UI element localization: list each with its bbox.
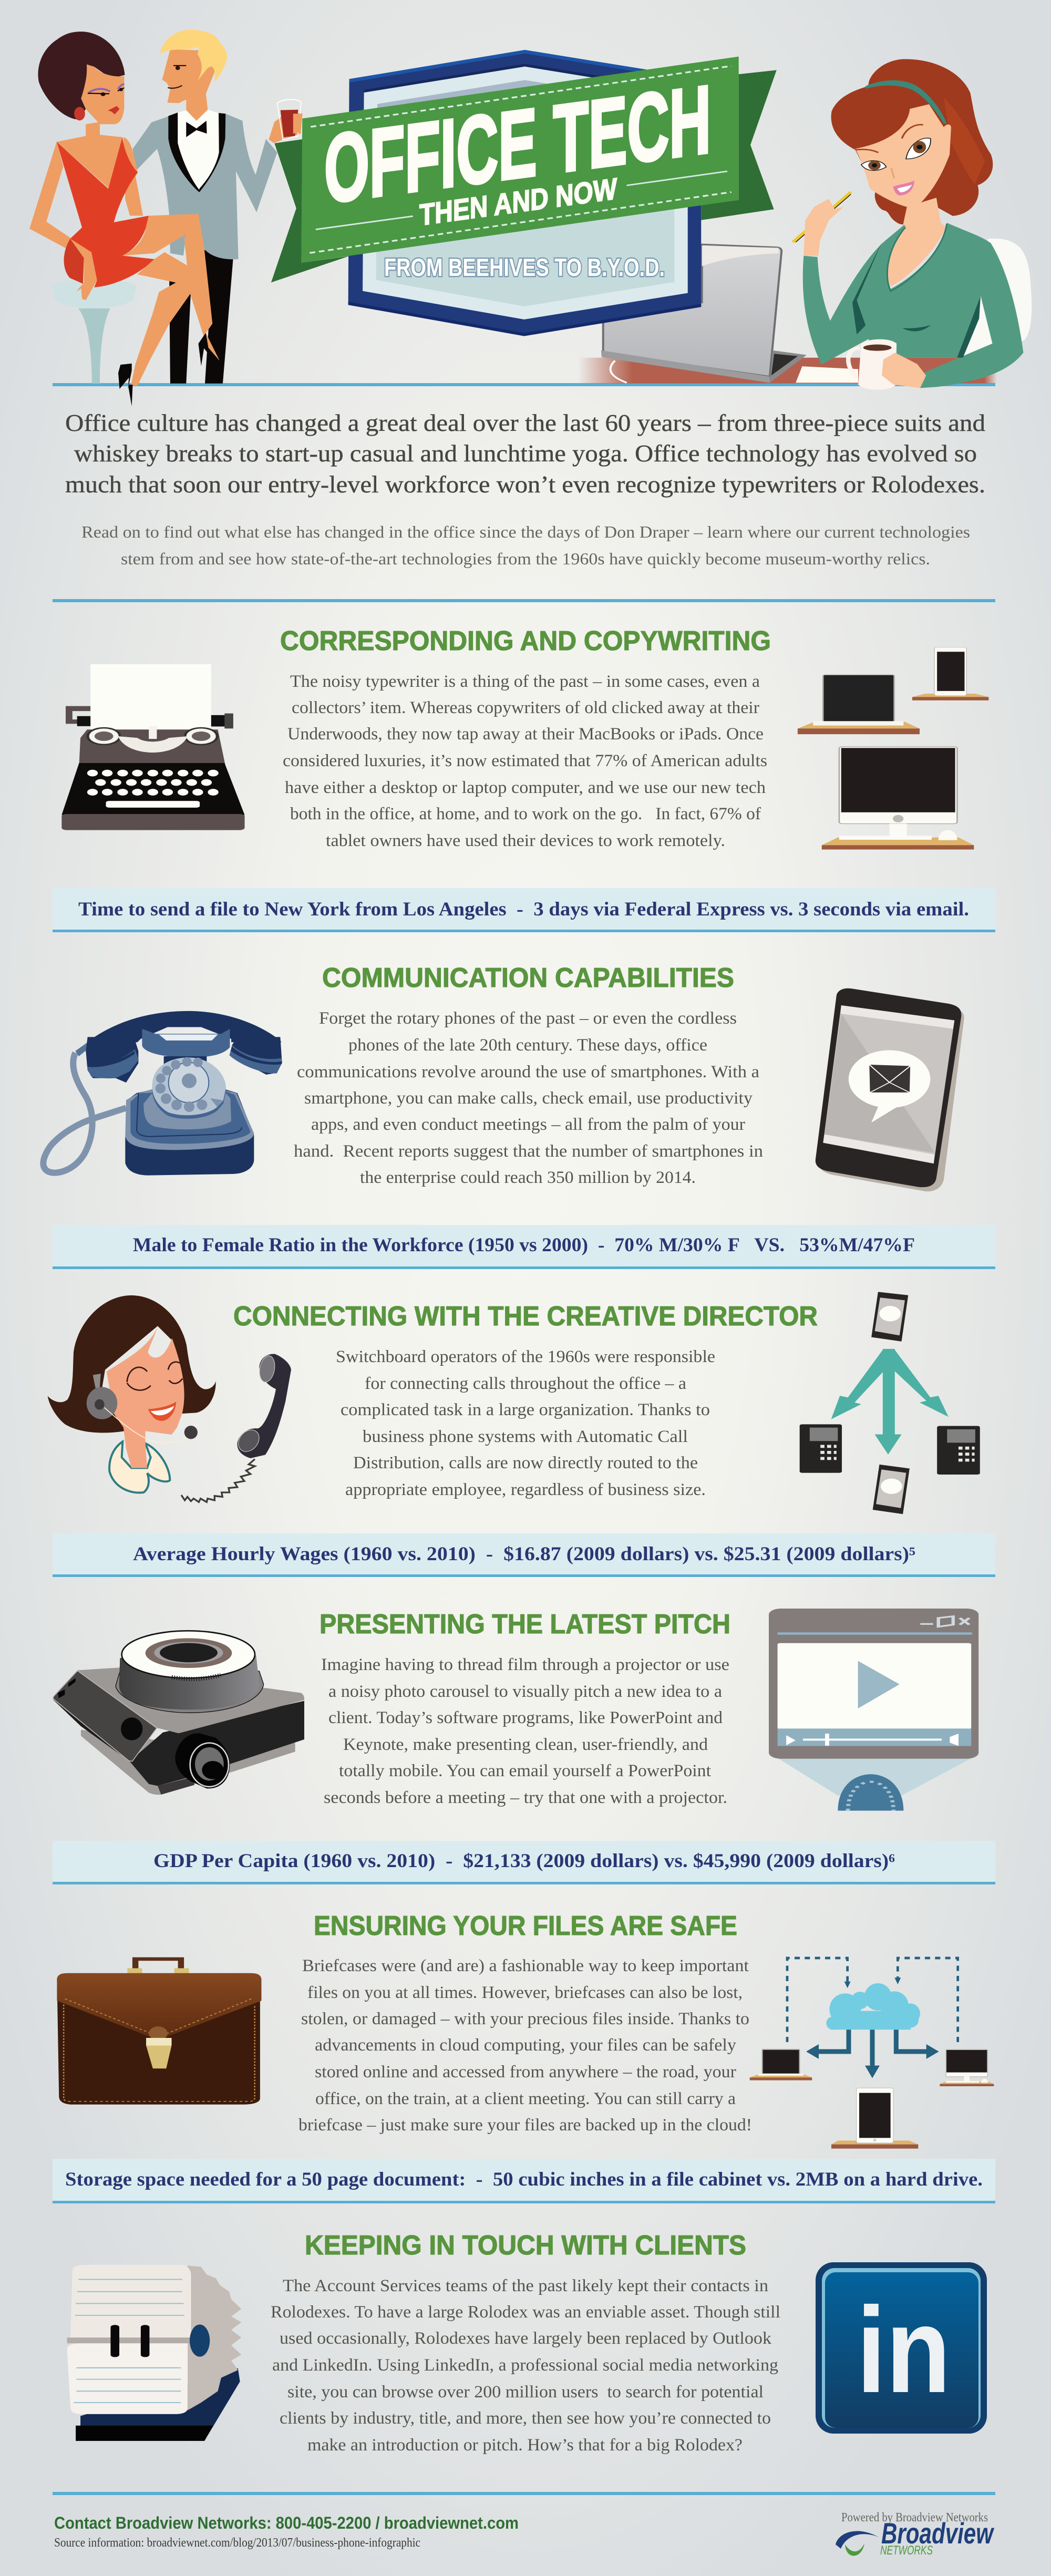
icon: typewriter: [61, 664, 245, 830]
body text: presenting: totally mobile. You can email yourself a PowerPoint: [339, 1761, 711, 1780]
body text: connecting: Distribution, calls are now directly routed to the: [353, 1454, 698, 1472]
stat bar 3: Average Hourly Wages (1960 vs. 2010) - $16.87 (2009 dollars) vs. $25.31 (2009 dollars)⁵: [133, 1543, 915, 1565]
body text: files safe: stored online and accessed from anywhere – the road, your: [315, 2063, 736, 2082]
ribbon: green banner: [271, 57, 777, 282]
icon: briefcase: [57, 1959, 261, 2105]
body text: files safe: briefcase – just make sure your files are backed up in the cloud!: [298, 2116, 752, 2135]
badge: navy hexagon: [348, 50, 701, 336]
rule: section start: [53, 599, 995, 602]
body text: keeping in touch: make an introduction or pitch. How’s that for a big Rolodex?: [307, 2436, 743, 2455]
logo: broadview: Broadview: [881, 2517, 995, 2550]
body text: files safe: office, on the train, at a client meeting. You can still carry a: [315, 2089, 736, 2108]
title: FROM BEEHIVES TO B.Y.O.D.: [384, 253, 665, 281]
icon: switchboard operator: [48, 1295, 291, 1502]
body text: files safe: advancements in cloud computing, your files can be safely: [315, 2036, 737, 2055]
heading: corresponding: CORRESPONDING AND COPYWRITING: [280, 626, 771, 656]
body text: presenting: a noisy photo carousel to visually pitch a new idea to a: [328, 1682, 722, 1701]
intro secondary text: [81, 522, 970, 568]
rule: footer: [53, 2492, 995, 2495]
heading: communication: COMMUNICATION CAPABILITIES: [322, 963, 734, 993]
body text: presenting: client. Today’s software programs, like PowerPoint and: [328, 1708, 723, 1727]
illustration: woman at laptop: [578, 59, 1032, 390]
heading: connecting: CONNECTING WITH THE CREATIVE DIRECTOR: [233, 1301, 818, 1332]
body text: connecting: business phone systems with Automatic Call: [363, 1427, 688, 1446]
body text: keeping in touch: The Account Services teams of the past likely kept their contacts in: [283, 2276, 768, 2295]
body text: files safe: files on you at all times. However, briefcases can also be lost,: [307, 1983, 743, 2002]
intro paragraph: Office culture has changed a great deal over the last 60 years – from three-piece suits and: [65, 409, 985, 436]
body text: corresponding: collectors’ item. Whereas copywriters of old clicked away at their: [292, 698, 759, 717]
body text: communication: Forget the rotary phones of the past – or even the cordless: [319, 1009, 737, 1028]
stat bar 1: [53, 888, 995, 932]
body text: presenting: Keynote, make presenting clean, user-friendly, and: [343, 1735, 708, 1754]
heading: files safe: ENSURING YOUR FILES ARE SAFE: [314, 1911, 737, 1941]
body text: corresponding: The noisy typewriter is a thing of the past – in some cases, even a: [290, 672, 760, 691]
icon: video player: [769, 1609, 978, 1811]
body text: communication: phones of the late 20th century. These days, office: [348, 1036, 707, 1055]
heading: presenting: PRESENTING THE LATEST PITCH: [320, 1609, 730, 1640]
body text: communication: hand. Recent reports suggest that the number of smartphones in: [294, 1142, 763, 1161]
body text: keeping in touch: Rolodexes. To have a large Rolodex was an enviable asset. Though still: [271, 2303, 780, 2322]
body text: files safe: [298, 1956, 752, 2135]
heading: keeping in touch: KEEPING IN TOUCH WITH CLIENTS: [305, 2230, 746, 2261]
powered by: Powered by Broadview Networks: [841, 2511, 988, 2525]
stat bar 5: [53, 2159, 995, 2203]
body text: communication: the enterprise could reach 350 million by 2014.: [360, 1168, 696, 1187]
icon: rolodex: [67, 2265, 241, 2441]
body text: connecting: for connecting calls throughout the office – a: [365, 1374, 686, 1393]
stat bar 2: Male to Female Ratio in the Workforce (1950 vs 2000) - 70% M/30% F VS. 53%M/47%F: [133, 1234, 915, 1256]
body text: keeping in touch: site, you can browse over 200 million users to search for potential: [287, 2383, 764, 2402]
icon: smartphone with email: [816, 988, 964, 1191]
body text: connecting: Switchboard operators of the 1960s were responsible: [336, 1347, 715, 1366]
logo: broadview: [836, 2517, 995, 2558]
title: OFFICE TECH: [324, 65, 711, 223]
stat bar 2: [53, 1225, 995, 1269]
body text: communication: [294, 1009, 763, 1187]
body text: corresponding: [283, 672, 767, 850]
body text: communication: communications revolve around the use of smartphones. With a: [297, 1063, 759, 1081]
icon: modern devices: [798, 647, 988, 850]
body text: keeping in touch: clients by industry, title, and more, then see how you’re connected to: [280, 2409, 771, 2428]
body text: communication: apps, and even conduct meetings – all from the palm of your: [311, 1115, 745, 1134]
icon: cloud sync diagram: [750, 1958, 994, 2149]
intro secondary text: stem from and see how state-of-the-art technologies from the 1960s have quickly become museum-worthy relics.: [121, 549, 930, 568]
body text: corresponding: both in the office, at home, and to work on the go. In fact, 67% of: [290, 805, 761, 823]
title: [324, 65, 711, 281]
body text: connecting: appropriate employee, regardless of business size.: [345, 1480, 706, 1499]
stat bar 3: [53, 1533, 995, 1577]
intro paragraph: much that soon our entry-level workforce won’t even recognize typewriters or Rolodexes.: [65, 471, 985, 498]
body text: files safe: stolen, or damaged – with your precious files inside. Thanks to: [301, 2010, 749, 2028]
icon: linkedin: in: [857, 2282, 951, 2418]
body text: presenting: Imagine having to thread film through a projector or use: [321, 1655, 729, 1674]
icon: call routing diagram: [800, 1292, 980, 1514]
body text: connecting: complicated task in a large organization. Thanks to: [341, 1400, 710, 1419]
body text: corresponding: considered luxuries, it’s now estimated that 77% of American adults: [283, 751, 767, 770]
icon: rotary phone: [43, 1011, 282, 1176]
intro paragraph: [65, 409, 985, 498]
body text: keeping in touch: [271, 2276, 780, 2455]
source line: Source information: broadviewnet.com/blog/2013/07/business-phone-infographic: [54, 2536, 420, 2550]
body text: files safe: Briefcases were (and are) a fashionable way to keep important: [302, 1956, 749, 1975]
body text: presenting: [321, 1655, 729, 1807]
body text: communication: smartphone, you can make calls, check email, use productivity: [304, 1089, 753, 1108]
title: THEN AND NOW: [419, 172, 617, 232]
body text: keeping in touch: and LinkedIn. Using LinkedIn, a professional social media networking: [272, 2356, 778, 2375]
body text: connecting: [336, 1347, 715, 1499]
body text: presenting: seconds before a meeting – try that one with a projector.: [324, 1788, 727, 1807]
body text: corresponding: tablet owners have used their devices to work remotely.: [326, 831, 725, 850]
footer contact: Contact Broadview Networks: 800-405-2200 / broadviewnet.com: [54, 2513, 519, 2532]
stat bar 4: [53, 1841, 995, 1884]
body text: corresponding: Underwoods, they now tap away at their MacBooks or iPads. Once: [287, 725, 764, 744]
illustration: sixties couple: [29, 30, 303, 406]
logo: broadview: NETWORKS: [880, 2543, 933, 2558]
stat bar 4: GDP Per Capita (1960 vs. 2010) - $21,133 (2009 dollars) vs. $45,990 (2009 dollars)⁶: [153, 1850, 895, 1872]
stat bar 1: Time to send a file to New York from Los Angeles - 3 days via Federal Express vs. 3 seconds via email.: [78, 899, 969, 920]
intro secondary text: Read on to find out what else has changed in the office since the days of Don Draper – learn where our current technologies: [81, 522, 970, 541]
rule: header base: [53, 383, 995, 386]
intro paragraph: whiskey breaks to start-up casual and lunchtime yoga. Office technology has evolved so: [74, 440, 977, 467]
icon: linkedin: [816, 2262, 987, 2434]
icon: slide projector: [53, 1631, 304, 1795]
stat bar 5: Storage space needed for a 50 page document: - 50 cubic inches in a file cabinet vs. 2MB on a hard drive.: [65, 2169, 983, 2190]
body text: keeping in touch: used occasionally, Rolodexes have largely been replaced by Outlook: [280, 2329, 772, 2348]
body text: corresponding: have either a desktop or laptop computer, and we use our new tech: [285, 778, 766, 797]
